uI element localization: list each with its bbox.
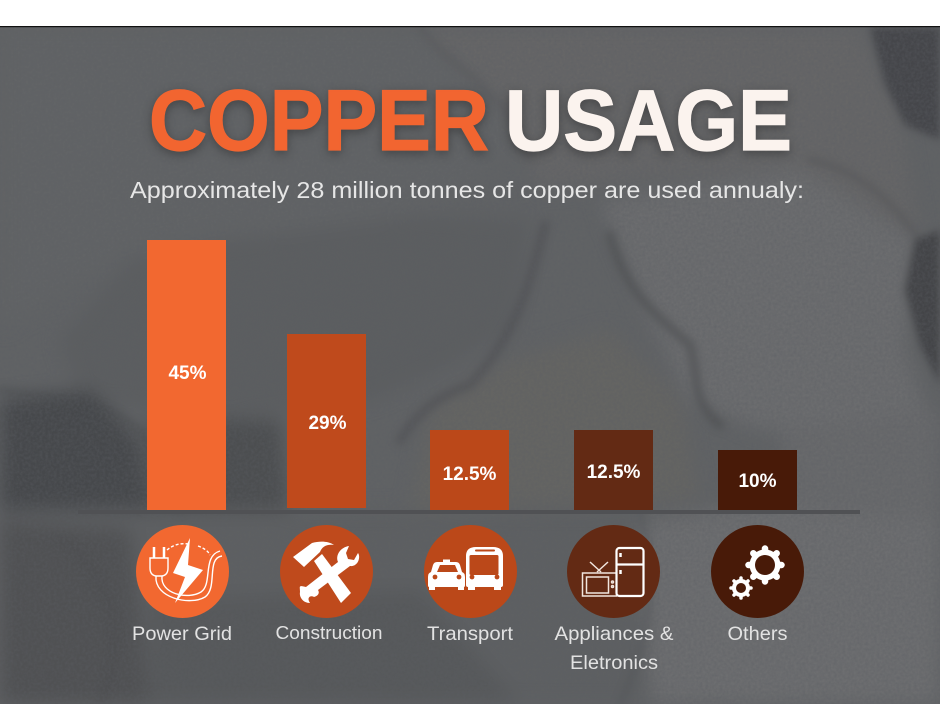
bar: Appliances 12.5%: 12.5%: [587, 462, 641, 483]
large gear: [748, 548, 782, 582]
icon: others: [711, 525, 804, 618]
label: Power Grid: Power Grid: [132, 623, 232, 645]
icon: transport: [424, 525, 517, 618]
bus: [466, 547, 503, 590]
bar: Power Grid 45%: [147, 240, 226, 510]
bar: Construction 29%: [287, 334, 366, 508]
subtitle: Approximately 28 million tonnes of copper are used annualy:: [130, 177, 804, 203]
bar: Transport 12.5%: 12.5%: [443, 464, 497, 485]
label: Appliances & Eletronics: Eletronics: [570, 652, 658, 674]
plug: [150, 544, 222, 601]
label: Others: Others: [728, 623, 788, 645]
taxi: [428, 560, 465, 590]
title: COPPER: [149, 73, 489, 169]
bar: Transport 12.5%: [430, 430, 509, 510]
television: [582, 562, 616, 596]
label: Appliances & Eletronics: [554, 623, 674, 674]
label: Construction: Construction: [276, 622, 382, 643]
axis baseline: [78, 510, 860, 514]
small gear: [731, 578, 751, 598]
title: [149, 73, 792, 169]
lightning bolt: [173, 538, 203, 603]
icon: appliances: [567, 525, 660, 618]
bar chart: [147, 240, 797, 510]
bar: Power Grid 45%: 45%: [168, 363, 207, 384]
icon: power grid: [136, 525, 229, 618]
bar: Appliances 12.5%: [574, 430, 653, 510]
refrigerator: [616, 548, 644, 596]
bar: Others 10%: [718, 450, 797, 510]
bar: Others 10%: 10%: [738, 471, 777, 492]
wrench: [300, 546, 359, 603]
icon: construction: [280, 525, 373, 618]
title: USAGE: [505, 73, 792, 169]
hammer: [293, 542, 351, 603]
label: Appliances & Eletronics: Appliances &: [554, 623, 674, 645]
bar: Construction 29%: 29%: [308, 413, 347, 434]
label: Transport: Transport: [427, 623, 514, 645]
